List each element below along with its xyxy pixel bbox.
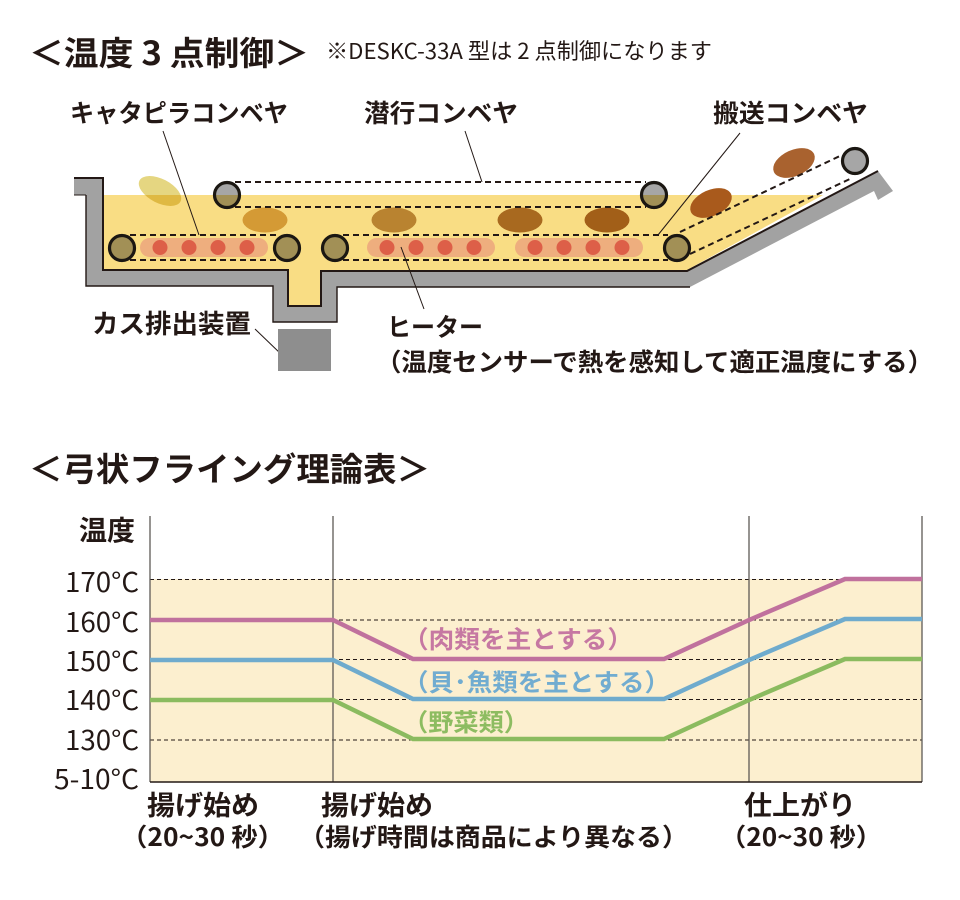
x label: frying stage: （揚げ時間は商品により異なる） — [299, 818, 688, 854]
note: DESKC-33A model: ※DESKC-33A 型は 2 点制御になります — [326, 34, 712, 66]
food items — [242, 142, 819, 232]
series label: shellfish and fish: （貝･魚類を主とする） — [403, 664, 670, 699]
label: heater: ヒーター — [387, 308, 483, 344]
label: heater note: （温度センサーで熱を感知して適正温度にする） — [376, 343, 933, 379]
label: transport conveyor: 搬送コンベヤ — [713, 94, 868, 130]
y axis labels: 160°C — [65, 601, 139, 640]
temperature chart — [150, 516, 922, 782]
line: shellfish and fish — [150, 619, 922, 699]
heading: bow-shaped frying theory chart: ＜弓状フライング理論表＞ — [29, 443, 430, 491]
rollers outline — [110, 148, 868, 260]
x label: frying stage — [299, 784, 688, 854]
y axis labels: 150°C — [65, 640, 139, 679]
title: temperature three-point control: ＜温度 3 点制御＞ — [29, 27, 309, 75]
tank wall — [74, 171, 893, 322]
food before frying — [134, 170, 186, 212]
rollers base — [110, 149, 867, 260]
line: vegetables — [150, 659, 922, 739]
label: scrap discharge device: カス排出装置 — [92, 304, 251, 341]
axis title: temperature: 温度 — [79, 508, 135, 548]
series label: vegetables: （野菜類） — [403, 704, 529, 739]
tank inner outline — [74, 171, 878, 306]
conveyor belts — [130, 155, 852, 260]
x label: start of frying: （20~30 秒） — [121, 818, 284, 854]
x label: finishing — [720, 784, 882, 854]
y axis labels: 170°C — [65, 561, 139, 600]
fryer diagram — [74, 131, 893, 371]
x label: finishing: （20~30 秒） — [720, 818, 882, 854]
y axis labels: 130°C — [65, 719, 139, 758]
x label: start of frying — [121, 784, 284, 854]
series label: meat: （肉類を主とする） — [403, 621, 633, 656]
heaters — [140, 238, 643, 257]
y axis labels: 140°C — [65, 679, 139, 718]
x label: frying stage: 揚げ始め — [321, 784, 433, 823]
x label: start of frying: 揚げ始め — [147, 784, 259, 823]
y axis labels: 5-10°C — [54, 758, 139, 797]
oil — [103, 195, 823, 306]
label: submerged conveyor: 潜行コンベヤ — [364, 94, 518, 130]
line: meat — [150, 579, 922, 659]
label: caterpillar conveyor: キャタピラコンベヤ — [70, 94, 288, 130]
x label: finishing: 仕上がり — [744, 784, 856, 823]
leader lines — [163, 131, 740, 355]
y axis labels — [54, 561, 139, 797]
scrap discharge box — [278, 329, 331, 371]
chart background — [150, 579, 922, 782]
